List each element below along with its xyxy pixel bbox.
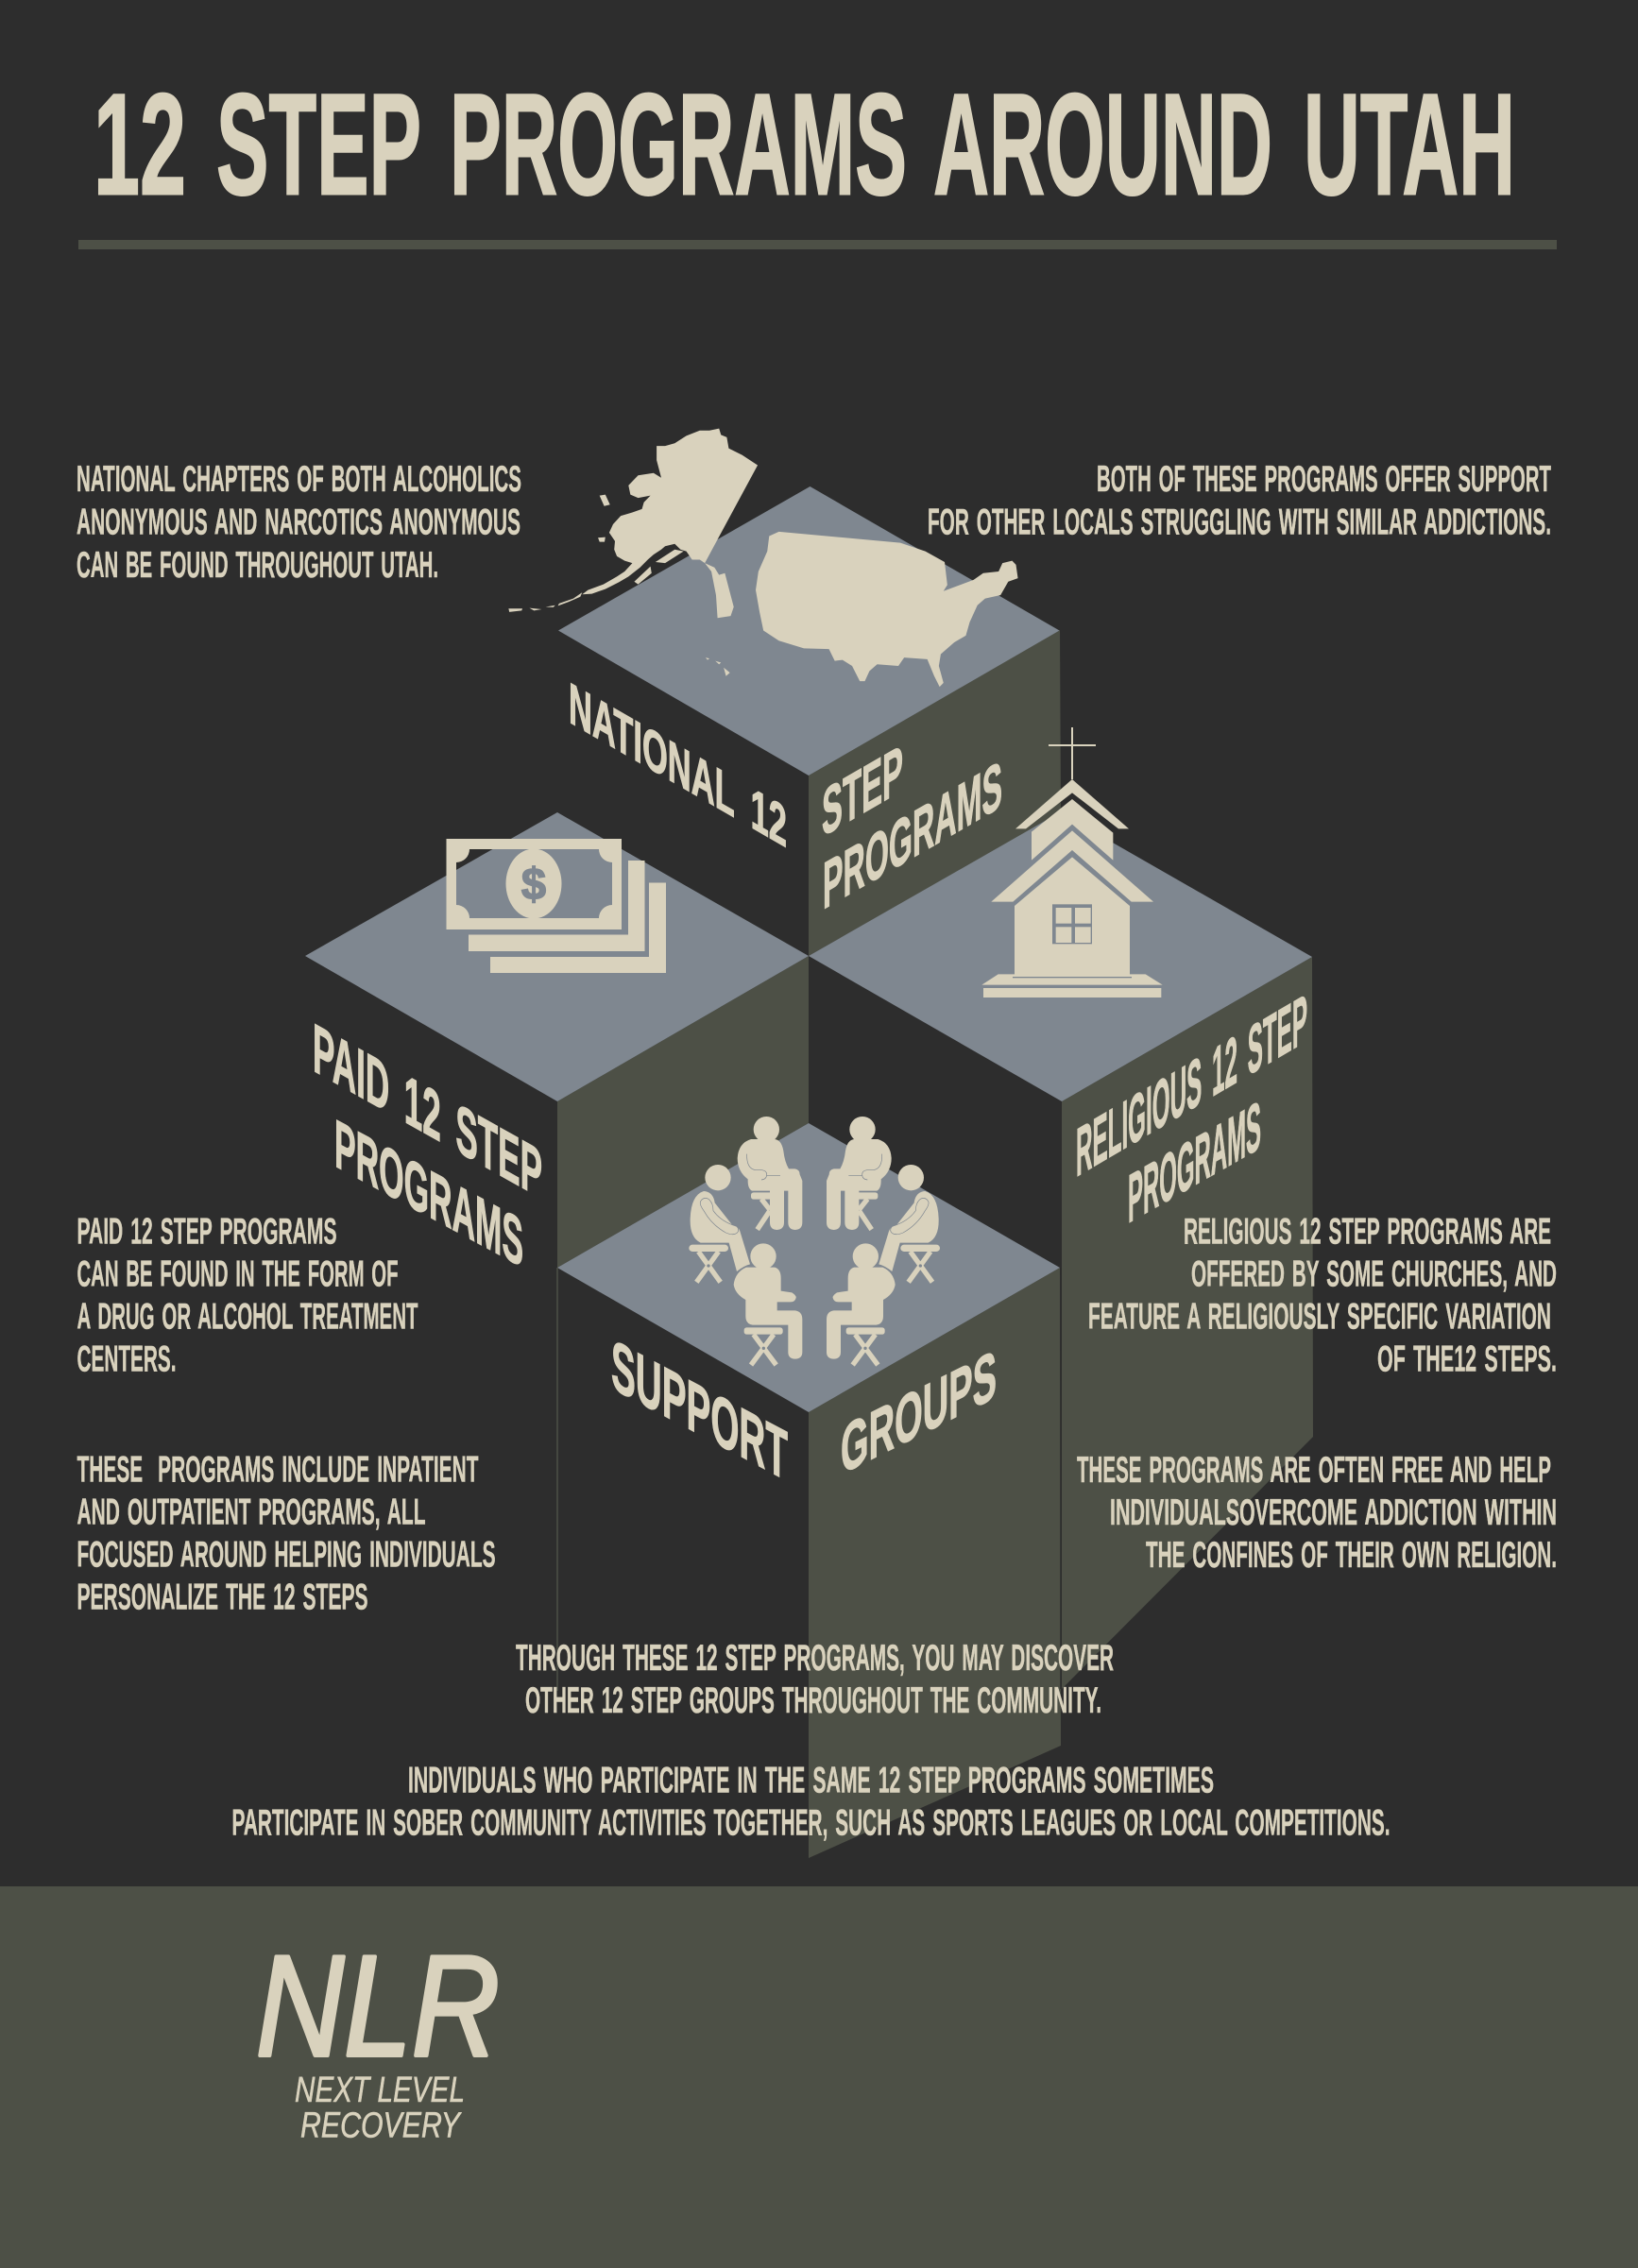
face label: religious 12 step programs (1076, 979, 1307, 1238)
face label: paid 12 step programs (313, 1008, 542, 1283)
text: discover other groups: OTHER 12 STEP GROUPS THROUGHOUT THE COMMUNITY. (525, 1680, 1101, 1721)
text: local support (928, 459, 1551, 542)
text: free programs (1077, 1450, 1557, 1576)
icon: map of the United States (508, 429, 1018, 687)
block: paid 12 step programs (305, 812, 809, 1268)
face label: step programs: STEP (822, 731, 903, 852)
logo: next level recovery: NLR (256, 1926, 500, 2087)
text: national chapters (77, 459, 521, 586)
infographic canvas: PROGRAMS (823, 747, 1002, 925)
text: national chapters: NATIONAL CHAPTERS OF BOTH ALCOHOLICS (77, 459, 521, 500)
face label: paid 12 step programs: PROGRAMS (334, 1105, 523, 1283)
block: national 12 step programs (558, 486, 1061, 956)
icon: support group circle of people (689, 1117, 940, 1365)
text: paid programs description: CENTERS. (77, 1339, 176, 1379)
title: 12 (94, 64, 186, 225)
icon: church (981, 727, 1163, 998)
text: paid programs description: PAID 12 STEP PROGRAMS (77, 1211, 336, 1253)
text: paid programs description: A DRUG OR ALCOHOL TREATMENT (77, 1296, 418, 1338)
text: paid programs description (77, 1211, 418, 1379)
text: national chapters: CAN BE FOUND THROUGHOUT UTAH. (77, 545, 438, 586)
title (94, 64, 1515, 225)
logo: next level recovery: NEXT LEVEL (295, 2071, 465, 2110)
title: STEP (216, 64, 421, 225)
block: support groups (557, 1123, 1061, 1858)
face label: groups: GROUPS (841, 1336, 997, 1490)
logo: next level recovery: RECOVERY (300, 2106, 462, 2146)
infographic canvas: PAID 12 STEP (313, 1008, 542, 1214)
text: inpatient and outpatient (77, 1449, 495, 1617)
face label: national 12: NATIONAL 12 (569, 669, 787, 860)
footer band (0, 1886, 1638, 2268)
text: national chapters: ANONYMOUS AND NARCOTICS ANONYMOUS (77, 503, 520, 542)
text: inpatient and outpatient: THESE PROGRAMS INCLUDE INPATIENT (77, 1449, 479, 1491)
text: religious programs description (1088, 1211, 1557, 1379)
title rule (78, 240, 1557, 249)
text: discover other groups (516, 1638, 1114, 1721)
text: sober community activities (232, 1761, 1391, 1844)
title: AROUND (933, 64, 1272, 225)
text: inpatient and outpatient: FOCUSED AROUND HELPING INDIVIDUALS (77, 1534, 495, 1576)
icon: stack of dollar bills: $ (521, 859, 546, 909)
text: inpatient and outpatient: AND OUTPATIENT PROGRAMS, ALL (77, 1492, 425, 1532)
icon: stack of dollar bills (446, 839, 666, 973)
logo: next level recovery (256, 1926, 500, 2146)
title: PROGRAMS (450, 64, 907, 225)
text: paid programs description: CAN BE FOUND IN THE FORM OF (77, 1254, 399, 1294)
face label: step programs (822, 731, 1002, 925)
block: religious 12 step programs (809, 812, 1313, 1689)
text: discover other groups: THROUGH THESE 12 STEP PROGRAMS, YOU MAY DISCOVER (516, 1638, 1114, 1679)
face label: support: SUPPORT (611, 1323, 788, 1496)
text: inpatient and outpatient: PERSONALIZE THE 12 STEPS (77, 1577, 368, 1617)
infographic canvas: PROGRAMS (1128, 1087, 1261, 1238)
